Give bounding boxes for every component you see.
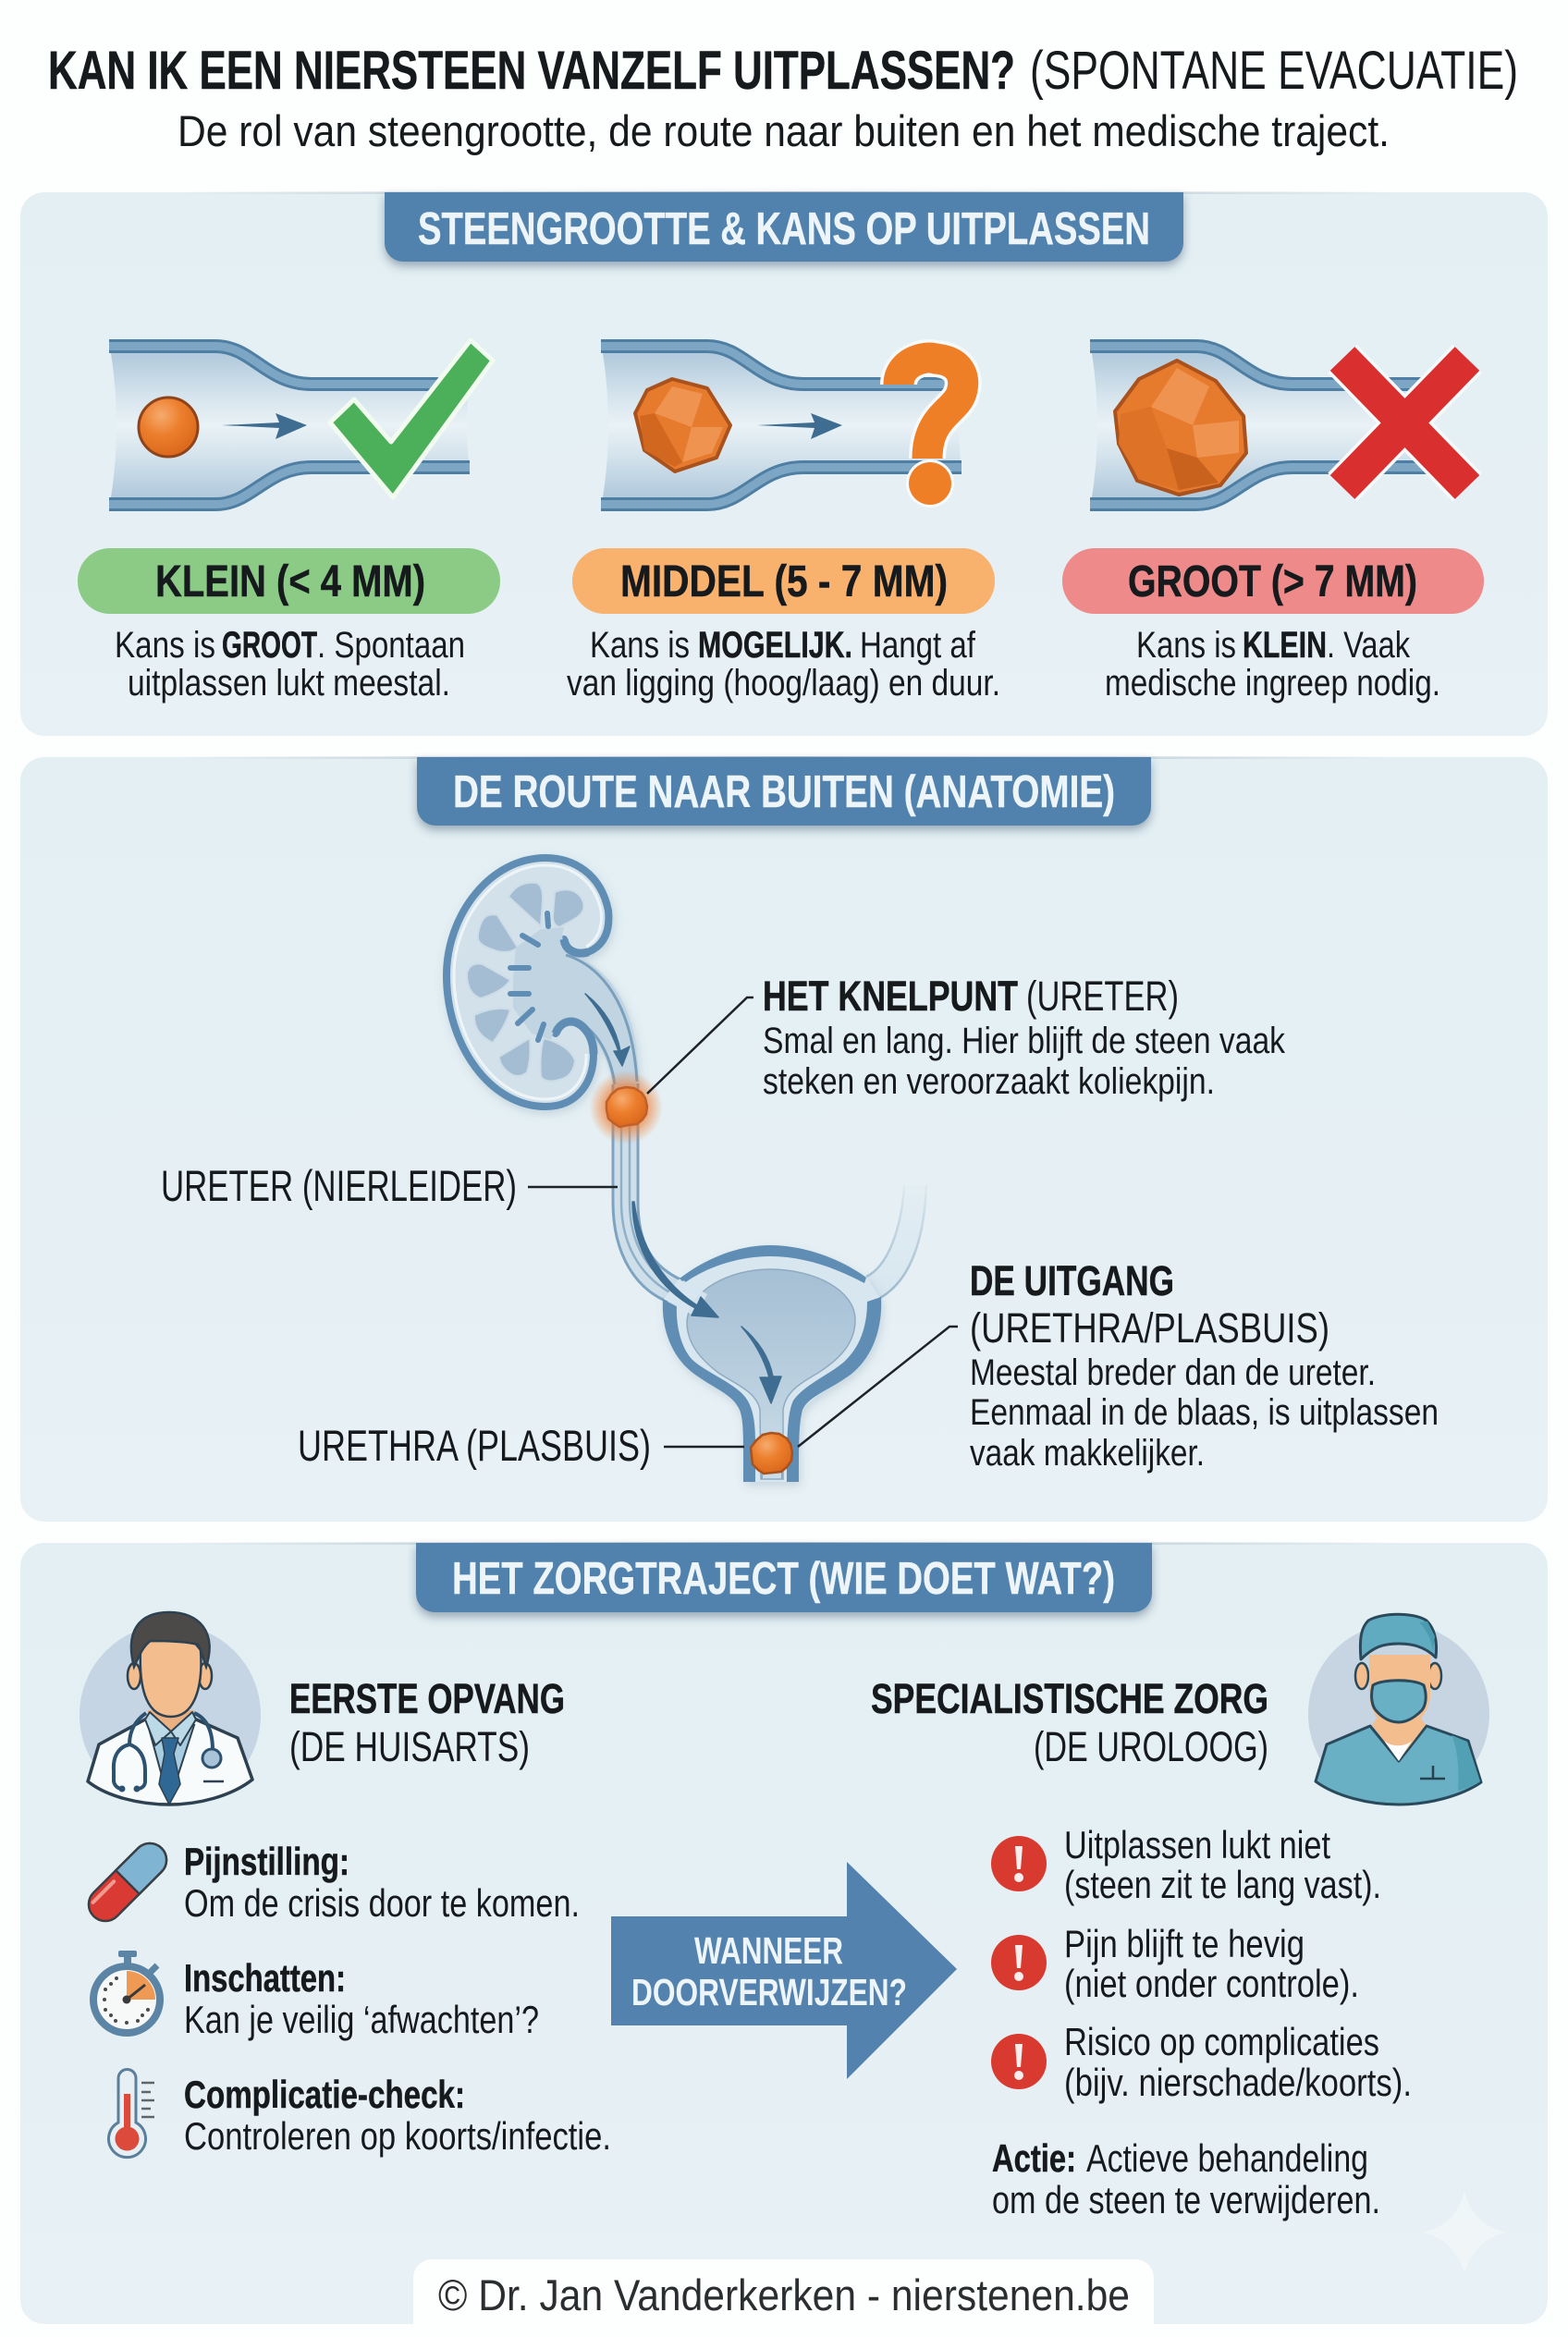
leader line: uitgang: [798, 1327, 958, 1447]
panel: steengrootte: [20, 191, 1548, 736]
heading: specialistische zorg: (DE UROLOOG): [1034, 1723, 1268, 1770]
arrow: kidney to ureter: [585, 994, 630, 1066]
label pill: groot: [1062, 548, 1484, 614]
panel background: [20, 192, 1548, 736]
alert item 2: [991, 1922, 1359, 2005]
text: klein: . Spontaan: [317, 625, 465, 666]
callout: de uitgang: [970, 1257, 1439, 1474]
heading banner: route: DE ROUTE NAAR BUITEN (ANATOMIE): [453, 767, 1115, 817]
text: middel: [567, 625, 1000, 704]
heading: specialistische zorg: [871, 1675, 1268, 1770]
arrow: medium stone: [757, 413, 842, 439]
callout: de uitgang: Meestal breder dan de ureter.: [970, 1352, 1376, 1393]
label pill: middel: MIDDEL (5 - 7 MM): [620, 557, 948, 606]
alert item 1: [991, 1823, 1381, 1906]
label pill: groot: GROOT (> 7 MM): [1128, 557, 1417, 606]
heading: specialistische zorg: SPECIALISTISCHE ZORG: [871, 1675, 1268, 1722]
text: klein: Kans is: [115, 625, 215, 666]
arrow: small stone: [222, 413, 307, 439]
icon: check mark: [330, 340, 493, 497]
alert item 3: [991, 2020, 1412, 2104]
tube: groot: [1090, 346, 1443, 505]
alert item 3: (bijv. nierschade/koorts).: [1064, 2061, 1412, 2104]
alert item 3: Risico op complicaties: [1064, 2020, 1379, 2063]
icon: thermometer: [108, 2069, 154, 2158]
icon: question mark: [899, 358, 963, 508]
alert item 2: (niet onder controle).: [1064, 1962, 1359, 2005]
label: urethra: URETHRA (PLASBUIS): [298, 1421, 651, 1470]
text: klein: [115, 625, 465, 704]
alert item 2: Pijn blijft te hevig: [1064, 1922, 1305, 1965]
label: ureter: URETER (NIERLEIDER): [161, 1161, 517, 1210]
label pill: klein: [78, 548, 500, 614]
callout: het knelpunt: HET KNELPUNT: [763, 973, 1018, 1020]
subtitle: De rol van steengrootte, de route naar buiten en het medische traject.: [178, 106, 1390, 155]
text: complicatie-check: [184, 2073, 611, 2158]
footer: [413, 2259, 1154, 2337]
heading banner: zorgtraject: HET ZORGTRAJECT (WIE DOET WAT?): [452, 1554, 1115, 1604]
arrow: ureter to bladder: [632, 1202, 718, 1317]
illustration: bladder: [663, 1245, 881, 1482]
icon: huisarts: [80, 1612, 261, 1805]
text: middel: Kans is: [590, 625, 690, 666]
heading banner: route: [417, 757, 1151, 826]
label pill: middel: [572, 548, 995, 614]
text: actie: [992, 2136, 1380, 2221]
icon: stopwatch: [93, 1951, 160, 2033]
illustration: ureter: [567, 955, 684, 1303]
callout: de uitgang: (URETHRA/PLASBUIS): [970, 1304, 1329, 1352]
title: KAN IK EEN NIERSTEEN VANZELF UITPLASSEN?: [48, 41, 1015, 101]
text: actie: Actie:: [992, 2136, 1076, 2180]
alert item 1: Uitplassen lukt niet: [1064, 1823, 1330, 1866]
callout: de uitgang: DE UITGANG: [970, 1257, 1174, 1304]
text: pijnstilling: Pijnstilling:: [184, 1840, 349, 1883]
arrow: wanneer doorverwijzen: WANNEER: [694, 1929, 843, 1972]
text: groot: Kans is: [1136, 625, 1236, 666]
text: actie: Actieve behandeling: [1086, 2136, 1368, 2180]
callout: het knelpunt: [763, 973, 1286, 1102]
leader line: knelpunt: [647, 997, 753, 1094]
leader line: ureter: [528, 1186, 618, 1188]
callout: het knelpunt: steken en veroorzaakt koliekpijn.: [763, 1061, 1215, 1102]
sparkle mark: [1422, 2191, 1507, 2274]
stone: medium: [635, 379, 730, 471]
callout: de uitgang: Eenmaal in de blaas, is uitplassen: [970, 1392, 1439, 1433]
icon: red cross: [1342, 359, 1467, 487]
text: middel: van ligging (hoog/laag) en duur.: [567, 663, 1000, 704]
text: groot: . Vaak: [1327, 625, 1411, 666]
icon: capsule: [82, 1837, 173, 1927]
text: pijnstilling: [184, 1840, 580, 1925]
callout: de uitgang: vaak makkelijker.: [970, 1433, 1205, 1474]
ureter entering bladder: [668, 1280, 707, 1316]
arrow: wanneer doorverwijzen: [611, 1862, 957, 2079]
tube: middel: [601, 346, 962, 505]
text: klein: uitplassen lukt meestal.: [128, 663, 450, 704]
stone: urethra: [751, 1433, 792, 1474]
panel background: [20, 757, 1548, 1522]
text: inschatten: Inschatten:: [184, 1956, 346, 2000]
icon: uroloog: [1308, 1614, 1489, 1805]
footer: © Dr. Jan Vanderkerken - nierstenen.be: [438, 2270, 1130, 2319]
text: inschatten: [184, 1956, 539, 2041]
callout: het knelpunt: Smal en lang. Hier blijft de steen vaak: [763, 1021, 1286, 1061]
text: complicatie-check: Controleren op koorts/infectie.: [184, 2114, 611, 2158]
heading banner: steengrootte: STEENGROOTTE & KANS OP UITPLASSEN: [418, 204, 1150, 254]
stone: large: [1115, 361, 1246, 495]
heading: eerste opvang: EERSTE OPVANG: [289, 1675, 565, 1722]
text: middel: MOGELIJK.: [698, 625, 852, 666]
illustration: second ureter: [866, 1185, 926, 1298]
heading banner: zorgtraject: [416, 1543, 1152, 1612]
text: klein: GROOT: [222, 625, 317, 666]
panel: anatomie: [20, 756, 1548, 1522]
text: complicatie-check: Complicatie-check:: [184, 2073, 465, 2116]
panel background: [20, 1543, 1548, 2324]
alert item 1: (steen zit te lang vast).: [1064, 1863, 1381, 1906]
text: groot: [1105, 625, 1440, 704]
tube: klein: [109, 346, 470, 505]
heading banner: steengrootte: [385, 192, 1183, 262]
illustration: kidney: [447, 858, 640, 1107]
heading: eerste opvang: (DE HUISARTS): [289, 1723, 530, 1770]
text: groot: KLEIN: [1243, 625, 1327, 666]
stone: knelpunt: [589, 1071, 663, 1144]
stone: small: [139, 398, 198, 457]
arrow: bladder to urethra: [741, 1327, 781, 1403]
text: actie: om de steen te verwijderen.: [992, 2178, 1380, 2221]
callout: het knelpunt: (URETER): [1026, 973, 1179, 1020]
text: inschatten: Kan je veilig ‘afwachten’?: [184, 1998, 539, 2041]
text: pijnstilling: Om de crisis door te komen.: [184, 1881, 580, 1925]
heading: eerste opvang: [289, 1675, 565, 1770]
arrow: wanneer doorverwijzen: DOORVERWIJZEN?: [631, 1971, 907, 2013]
panel: zorgtraject: [20, 1542, 1548, 2324]
leader line: urethra: [664, 1446, 744, 1448]
text: groot: medische ingreep nodig.: [1105, 663, 1440, 704]
text: middel: Hangt af: [860, 625, 976, 666]
label pill: klein: KLEIN (< 4 MM): [155, 557, 425, 606]
